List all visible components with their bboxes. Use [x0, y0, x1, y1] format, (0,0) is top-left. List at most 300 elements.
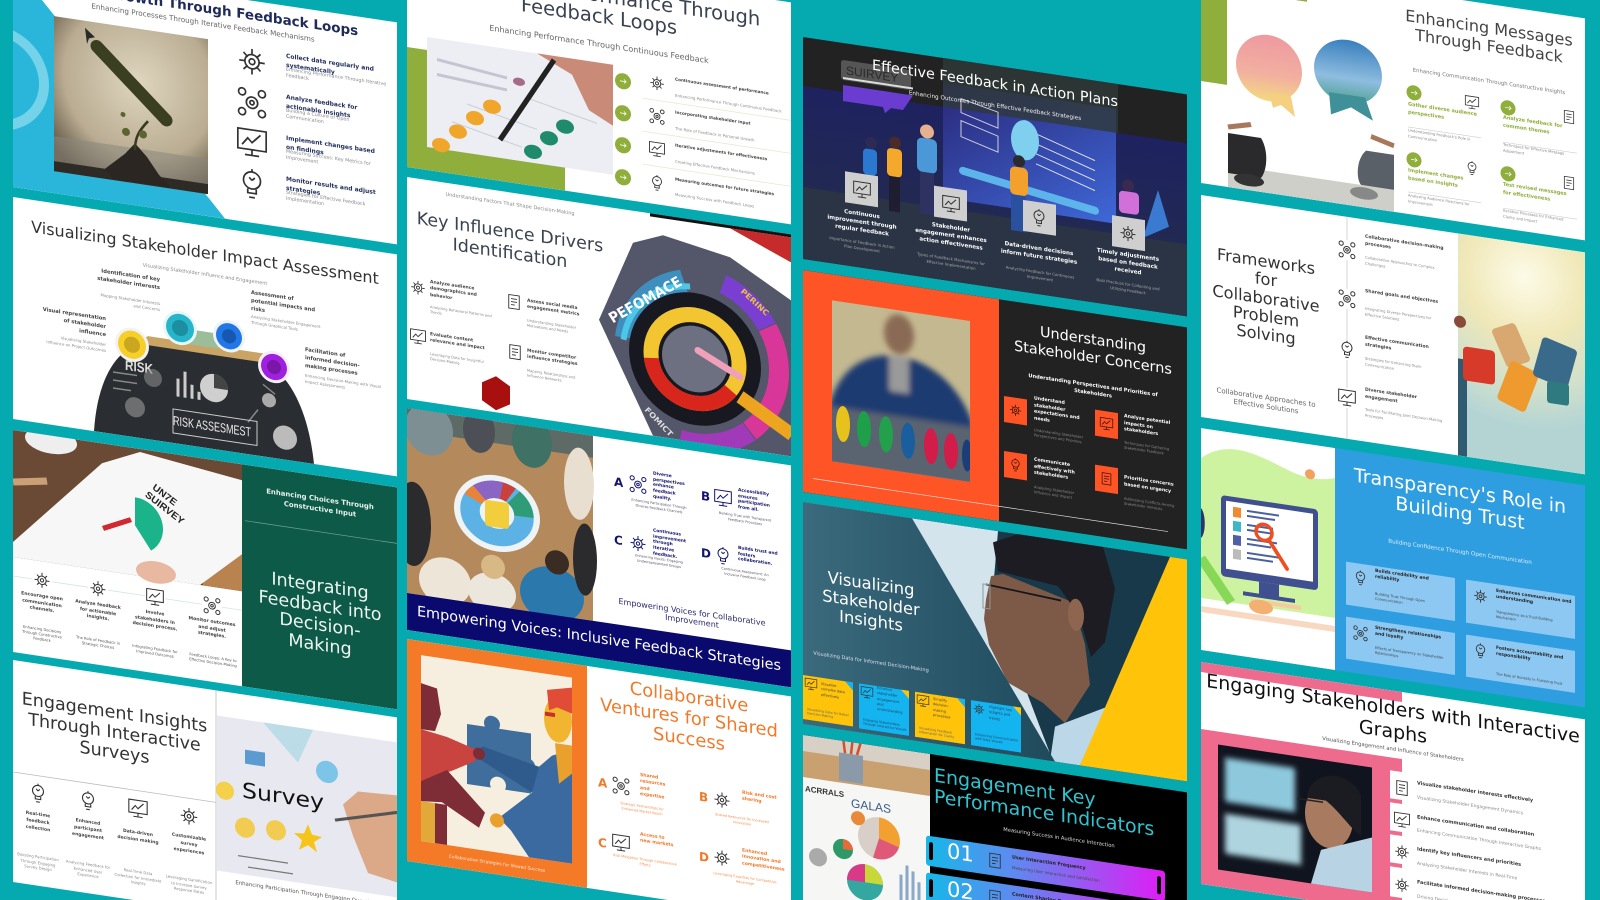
illustration: team at survey screen: SUIRVEY [846, 63, 898, 85]
icon [1464, 93, 1480, 112]
title: Through Feedback [1415, 25, 1563, 66]
icon [1008, 457, 1023, 474]
heading: Monitor competitor influence strategies [527, 349, 578, 368]
icon [1393, 842, 1411, 862]
text: Analyzing Stakeholder Interests in Real-Time [1417, 862, 1517, 882]
heading: Incorporating stakeholder input [675, 110, 750, 126]
icon [714, 488, 732, 507]
title: Success [653, 723, 725, 755]
icon [32, 784, 44, 803]
title [1335, 462, 1585, 544]
photo: man at monitor on pink block [1201, 662, 1402, 900]
number 01: 01 [947, 839, 974, 867]
card 2 heading: Enhances communication and understanding [1496, 589, 1572, 606]
text: Enhancing Decision-Making with Visual Impact Assessments [305, 373, 381, 390]
heading: Risk and cost sharing [742, 791, 777, 805]
heading: Analyze feedback for actionable insights. [75, 599, 121, 623]
subtitle: Enhancing Performance Through Continuous Feedback [489, 24, 709, 65]
panel: slide, performance through feedback loops [407, 0, 791, 224]
text: and Concerns [133, 303, 160, 312]
caption: Effective Solutions [1234, 398, 1298, 416]
text: Continuous Assessment: An Inclusive Feedback Loop [721, 566, 769, 582]
icon [1352, 569, 1369, 588]
heading: Prioritize concerns based on urgency [1124, 475, 1174, 494]
panel: slide, interactive surveys [13, 660, 397, 900]
heading: Shared resources and expertise [640, 773, 665, 801]
title: Engagement Key [934, 765, 1096, 811]
title: Graphs [1359, 716, 1427, 748]
photo: survey paper on desk: SUIRVEY [143, 490, 186, 527]
text: Building Trust with Transparent Feedback Processes [719, 511, 771, 526]
icon [1561, 174, 1577, 192]
caption [602, 595, 782, 640]
icon [804, 676, 818, 692]
heading: Timely adjustments [1097, 248, 1159, 263]
photo: desk with hand-drawn charts: GALAS [851, 796, 891, 816]
panel: slide, engagement KPIs [803, 735, 1187, 900]
title: Effective Feedback in Action Plans [872, 58, 1118, 110]
heading: Analyze feedback for common themes [1503, 115, 1562, 135]
icon [1099, 415, 1114, 432]
icon [972, 701, 986, 717]
chart: risk assessment chalkboard with rings: RISK [125, 357, 154, 377]
photo: puzzle pieces with sun [1201, 195, 1585, 474]
caption: Collaborative Approaches to [1216, 386, 1316, 409]
photo: hand writing survey: Survey [242, 777, 324, 814]
text: Visualizing Stakeholder Engagement Dynamics [1417, 796, 1523, 816]
heading: Real-time feedback collection [26, 811, 50, 833]
heading [817, 204, 907, 242]
title: Problem [1233, 302, 1299, 331]
card 4 text: Highlight key insights and trends [989, 705, 1012, 721]
item 1 heading: Collect data regularly and [286, 53, 374, 73]
card 1 text: Visualize complex data effectively [821, 682, 845, 699]
caption: Collaborative Strategies for Shared Success [449, 855, 545, 874]
item 1 heading: systematically [286, 62, 335, 76]
title: Visualizing Stakeholder Impact Assessment [31, 217, 379, 288]
card 2 text: Transparency as a Trust-Building Mechanism [1496, 610, 1553, 622]
text: Best Practices for Collecting and Utilizing Feedback [1096, 277, 1160, 295]
panel title: Feedback into [258, 587, 382, 625]
text: Feedback Loops: A Key to Effective Decision-Making [189, 652, 237, 668]
heading: Continuous improvement through iterative feedback. [653, 528, 686, 560]
subtitle: Visualizing Stakeholder Influence and Engagement [143, 262, 267, 287]
heading: Visual representation [43, 307, 106, 322]
text: Techniques for Effective Message Adjustment [1503, 143, 1564, 156]
heading: Enhance communication and collaboration [1417, 814, 1534, 838]
title: Enhancing Messages [1405, 6, 1573, 50]
panel: slide, key influence drivers [407, 177, 791, 456]
item 2 heading [286, 94, 358, 119]
title [589, 673, 789, 765]
icon [1393, 810, 1411, 830]
heading [251, 290, 315, 314]
text: Influence on Project Outcomes [46, 339, 106, 353]
icon [652, 175, 662, 191]
icon [986, 850, 1004, 871]
text: Analyzing Stakeholder Engagement Through Graphical Tools [251, 314, 321, 332]
heading: Assessment of [251, 290, 294, 302]
card 4 text: The Role of Honesty in Fostering Trust [1496, 672, 1562, 686]
icon [611, 831, 631, 854]
heading: Enhanced innovation and competitiveness [742, 848, 785, 873]
title [934, 766, 1184, 845]
card 1 caption: Visualizing Data for Better Decision-Making [807, 707, 849, 720]
photo: man in profile with angled shapes [803, 502, 1187, 781]
text: Analyzing Behavioral Patterns and Trends [430, 305, 492, 318]
icon [1337, 238, 1357, 261]
icon: gear bulb [239, 48, 265, 75]
text: The Role of Feedback in Personal Growth [675, 126, 754, 143]
icon [1472, 642, 1489, 661]
chart: performance gauge graphic: FOMICT [643, 406, 675, 439]
text: Mapping Relationships and Influence Networks [527, 369, 575, 383]
heading [305, 347, 360, 376]
text: Leveraging Data for Insightful Decision-Making [430, 352, 484, 366]
heading: Evaluate content relevance and impact [430, 332, 485, 352]
card 1 text: Building Trust Through Open Communication [1375, 592, 1425, 605]
heading: Effective communication strategies [1365, 336, 1429, 351]
icon: people [238, 86, 266, 119]
icon [202, 594, 222, 617]
heading: inform future strategies [1001, 249, 1077, 266]
title: Identification [453, 235, 567, 272]
chart: performance gauge graphic: PEFOMACE [606, 274, 685, 327]
icon [1393, 875, 1411, 895]
text: Strategies for Enhancing Team Communication [1365, 357, 1422, 371]
text: Techniques for Gathering Stakeholder Feedback [1124, 441, 1169, 456]
panel: slide, visualizing stakeholder insights [803, 502, 1187, 781]
heading: making processes [305, 363, 358, 376]
text: Understanding Stakeholder Motivations and Needs [527, 319, 576, 334]
title: for [1255, 269, 1277, 291]
text: Analyzing Stakeholder Influence and Impact [1034, 485, 1074, 500]
heading: Collaborative decision-making processes [1365, 235, 1443, 251]
title: Through Interactive [28, 710, 201, 756]
icon [1561, 108, 1577, 126]
heading: stakeholder interests [97, 276, 160, 291]
title: Visualizing [828, 568, 914, 600]
heading: Identify key influencers and priorities [1417, 846, 1521, 868]
heading: potential impacts and [251, 298, 315, 313]
title [22, 689, 207, 768]
card 1 heading: Builds credibility and reliability [1375, 569, 1429, 584]
item 3 text: Measuring Success: Key Metrics for Improvement [286, 150, 371, 167]
heading: action effectiveness [919, 236, 983, 252]
icon [941, 193, 961, 216]
heading: of stakeholder [64, 318, 106, 330]
heading: received [1114, 267, 1142, 277]
heading: Data-driven decisions [1005, 241, 1073, 257]
icon [1337, 287, 1357, 310]
illustration: monitor with magnifier [1201, 428, 1585, 707]
icon [1393, 778, 1411, 798]
heading: Iterative adjustments for effectiveness [675, 143, 767, 161]
heading: Monitor outcomes and adjust strategies. [189, 616, 235, 640]
text: Analyzing Feedback for Continuous Improvement [1006, 264, 1074, 282]
text: Integrating Diverse Perspectives for Effective Solutions [1365, 307, 1431, 322]
heading: informed decision- [305, 355, 360, 369]
panel: slide, transparency builds trust [1201, 428, 1585, 707]
panel title: Integrating [271, 569, 369, 604]
text: Enhancing Participation Through Diverse Feedback Channels [631, 498, 687, 514]
heading: Measuring outcomes for future strategies [675, 177, 774, 196]
title: Frameworks [1217, 245, 1315, 278]
subheading [999, 369, 1187, 412]
photo: desk with hand-drawn charts: ACRRALS [805, 784, 845, 799]
heading: Understand stakeholder expectations and needs [1034, 396, 1080, 423]
icon [712, 789, 732, 812]
chart: risk assessment chalkboard with rings: RISK ASSESMEST [173, 413, 251, 440]
icon [128, 798, 148, 818]
text: Enhancing Performance Through Continuous Feedback [675, 93, 782, 114]
illustration: team at survey screen [803, 37, 1187, 316]
icon [650, 76, 664, 90]
icon [180, 808, 198, 825]
panel title: Making [288, 631, 352, 660]
photo: survey paper on desk [13, 430, 397, 710]
heading: risks [251, 305, 265, 314]
card 2 text: Enhance stakeholder engagement and understanding [877, 686, 902, 715]
icon [1352, 624, 1369, 643]
title: Key Influence Drivers [417, 209, 603, 257]
icon [1464, 159, 1480, 178]
chart: risk assessment chalkboard with rings [94, 310, 314, 464]
panel heading: Constructive Input [284, 499, 356, 518]
icon: bulb [242, 169, 262, 199]
card 3 text: Simplify decision-making processes [933, 697, 950, 719]
icon [1337, 386, 1357, 409]
icon [628, 532, 648, 555]
icon [1099, 470, 1114, 487]
card 4 heading: Fosters accountability and responsibility [1496, 646, 1563, 662]
heading: Enhanced participant engagement [72, 818, 104, 841]
text: Strategic Partnerships for Enhanced Market Reach [620, 801, 664, 816]
icon [1029, 207, 1049, 230]
text: Risk Mitigation Through Collaborative Efforts [613, 853, 677, 867]
item 4 heading: strategies [286, 185, 320, 197]
icon [986, 887, 1004, 900]
heading: Test revised messages for effectiveness [1503, 182, 1567, 202]
icon [860, 685, 874, 701]
letter A: A [614, 475, 623, 490]
item 4 heading: Monitor results and adjust [286, 176, 376, 196]
letter C: C [614, 533, 623, 548]
heading: Diverse stakeholder engagement [1365, 388, 1417, 404]
heading: Shared goals and objectives [1365, 289, 1438, 305]
text: Understanding Stakeholder Perspectives and Priorities [1034, 428, 1083, 445]
text: Enhancing Decisions Through Constructive Feedback [22, 625, 62, 643]
panel: slide, frameworks for problem solving [1201, 195, 1585, 474]
title [1201, 243, 1331, 354]
icon: monitor [237, 126, 267, 158]
subtitle: Visualizing Data for Informed Decision-Making [813, 651, 929, 674]
icon [611, 774, 631, 797]
heading: Communicate effectively with stakeholders [1034, 458, 1075, 481]
letter B: B [701, 489, 710, 504]
photo: hand writing survey [13, 690, 397, 900]
card 3 caption: Visualizing Feedback Information for Clarity [919, 726, 954, 740]
panel: slide, collaborative ventures [407, 639, 791, 900]
panel: slide, enhancing messages [1201, 0, 1585, 240]
item 2 heading: Analyze feedback for [286, 94, 357, 111]
panel title: Decision- [279, 610, 361, 642]
letter D: D [701, 546, 711, 561]
heading [97, 268, 160, 291]
photo: desk with hand-drawn charts [803, 735, 1187, 900]
title [803, 565, 939, 641]
subtitle: Visualizing Engagement and Influence of Stakeholders [1322, 736, 1464, 763]
card 4 caption: Enhancing Communication with Data Visuals [975, 732, 1018, 745]
panel heading: Enhancing Choices Through [266, 487, 374, 511]
title: Collaborative [1212, 281, 1320, 316]
item 4 text: Strategies for Effective Feedback Implementation [286, 191, 365, 207]
card 3 heading: Strengthens relationships and loyalty [1375, 626, 1441, 641]
heading: based on feedback [1098, 256, 1158, 271]
title [1393, 5, 1585, 69]
heading: Assess social media engagement metrics [527, 299, 579, 318]
icon [1008, 402, 1023, 419]
text: Analyzing Audience Reactions for Improvement [1408, 193, 1470, 207]
icon [1337, 338, 1357, 361]
letter B: B [699, 789, 708, 805]
text: Shared Resources for Increased Innovation [715, 812, 769, 826]
panel title [258, 569, 382, 660]
heading: Analyze potential impacts on stakeholders [1124, 414, 1170, 437]
panel: slide, stakeholder concerns [803, 270, 1187, 549]
item 1 text: Enhancing Performance Through Iterative Feedback [286, 68, 386, 88]
subheading: Stakeholders [1074, 388, 1112, 399]
title: Stakeholder [822, 586, 920, 619]
icon [509, 344, 521, 360]
title: Building Trust [1395, 493, 1525, 534]
heading [906, 217, 996, 255]
heading: Diverse perspectives enhance feedback quality. [653, 471, 685, 502]
title: Performance Indicators [934, 786, 1154, 841]
heading: improvement through [827, 215, 897, 231]
icon [630, 475, 646, 494]
caption: Empowering Voices for Collaborative [618, 597, 766, 628]
title: Solving [1236, 321, 1296, 349]
text: Addressing Conflicts Among Stakeholder Interests [1124, 497, 1174, 512]
icon [852, 178, 872, 201]
photo: survey paper on desk: UN7E [150, 483, 179, 509]
icon [649, 141, 665, 158]
card 2 caption: Engaging Stakeholders Through Interactive Visuals [863, 717, 907, 732]
panel: slide, growth through feedback loops [13, 0, 397, 244]
caption [1201, 384, 1331, 422]
photo: blurred man and pawns [803, 270, 1168, 532]
heading: Continuous [844, 209, 880, 220]
icon [1118, 222, 1138, 245]
icon [713, 545, 733, 568]
icon [1472, 587, 1489, 606]
icon [410, 328, 426, 344]
title: Stakeholder Concerns [1014, 339, 1172, 378]
panel: slide, integrating feedback [13, 430, 397, 709]
subtitle: Measuring Success in Audience Interaction [1003, 827, 1115, 849]
heading: Implement changes based on insights [1408, 167, 1463, 188]
text: Integrating Feedback for Improved Outcomes [132, 644, 178, 659]
icon [411, 280, 425, 294]
item 2 heading: actionable insights [286, 103, 350, 119]
title: Ventures for Shared [600, 694, 778, 742]
title [999, 317, 1187, 381]
icon [32, 569, 52, 592]
heading: influence [79, 328, 106, 338]
heading: Builds trust and fosters collaboration. [738, 546, 778, 567]
photo: pen on checklist [407, 37, 791, 190]
text: Creating Effective Feedback Mechanisms [675, 159, 755, 176]
letter A: A [598, 775, 607, 791]
letter C: C [598, 835, 607, 851]
item 2 text: Building a Culture of Open Communication [286, 109, 349, 125]
text: Analyzing Feedback for Enhanced User Experience [66, 858, 110, 880]
text: Boosting Participation Through Engaging Survey Design [17, 851, 59, 873]
panel: slide, empowering voices [407, 408, 791, 687]
title: Engagement Insights [22, 689, 207, 737]
title: Insights [839, 607, 903, 635]
subtitle: Enhancing Outcomes Through Effective Feedback Strategies [909, 90, 1081, 122]
heading: Visualize stakeholder interests effectively [1417, 780, 1533, 804]
heading: Stakeholder [932, 222, 970, 234]
heading: Encourage open communication channels. [21, 591, 63, 615]
photo: group around feedback wheel [407, 408, 791, 688]
chart: performance gauge graphic: PERINC [739, 287, 771, 318]
text: The Role of Feedback in Strategic Choices [76, 635, 120, 650]
text: Leveraging Gamification to Increase Survey Response Rates [166, 873, 212, 895]
chart: performance gauge graphic [482, 213, 791, 456]
text: Visualizing Stakeholder [61, 335, 106, 347]
text: Importance of Feedback in Action Plan Development [829, 235, 895, 253]
text: Tools for Facilitating Joint Decision-Making Processes [1365, 408, 1442, 423]
heading: Analyze audience demographics and behavior [430, 280, 477, 301]
subtitle: Building Confidence Through Open Communication [1388, 539, 1532, 566]
text: Enhancing Communication Through Interactive Graphs [1417, 829, 1541, 852]
card 3 text: Effects of Transparency on Stakeholder Relationships [1375, 646, 1443, 660]
icon [508, 294, 520, 310]
subheading: Understanding Perspectives and Priorities of [1028, 373, 1158, 398]
text: Types of Feedback Mechanisms for Effective Implementation [917, 251, 985, 271]
subtitle: Enhancing Communication Through Constructive Insights [1413, 67, 1565, 96]
icon [712, 847, 732, 870]
panel: slide, engaging stakeholders with graphs [1201, 662, 1585, 900]
illustration: handshake with puzzle piece [407, 639, 791, 900]
item 3 heading: on findings [286, 144, 324, 156]
heading [994, 238, 1084, 268]
heading: Facilitation of [305, 347, 345, 359]
title: Understanding [1040, 324, 1146, 356]
text: Enhancing Inputs: Engaging Underrepresented Groups [635, 553, 683, 569]
icon [82, 791, 94, 810]
text: Measuring Success with Feedback Loops [675, 192, 754, 209]
icon [649, 108, 665, 125]
letter D: D [699, 849, 709, 865]
title: Collaborative [630, 678, 748, 717]
heading: Continuous assessment of performance [675, 77, 769, 96]
item 3 heading: Implement changes based [286, 135, 375, 155]
panel: slide, stakeholder impact assessment [13, 197, 397, 476]
KPI heading: User Interaction Frequency [1012, 855, 1086, 871]
heading: Data-driven decision making [117, 829, 159, 846]
subtitle: Understanding Factors That Shape Decision-Making [445, 192, 575, 217]
banner title: Empowering Voices: Inclusive Feedback Strategies [417, 604, 781, 674]
heading [42, 307, 106, 338]
text: Understanding Feedback's Role in Communication [1408, 128, 1470, 142]
heading: Involve stakeholders in decision process. [133, 610, 177, 633]
heading: Accessibility ensures participation from all. [738, 488, 770, 513]
text: Iterative Processes for Enhanced Clarity and Impact [1503, 209, 1564, 223]
